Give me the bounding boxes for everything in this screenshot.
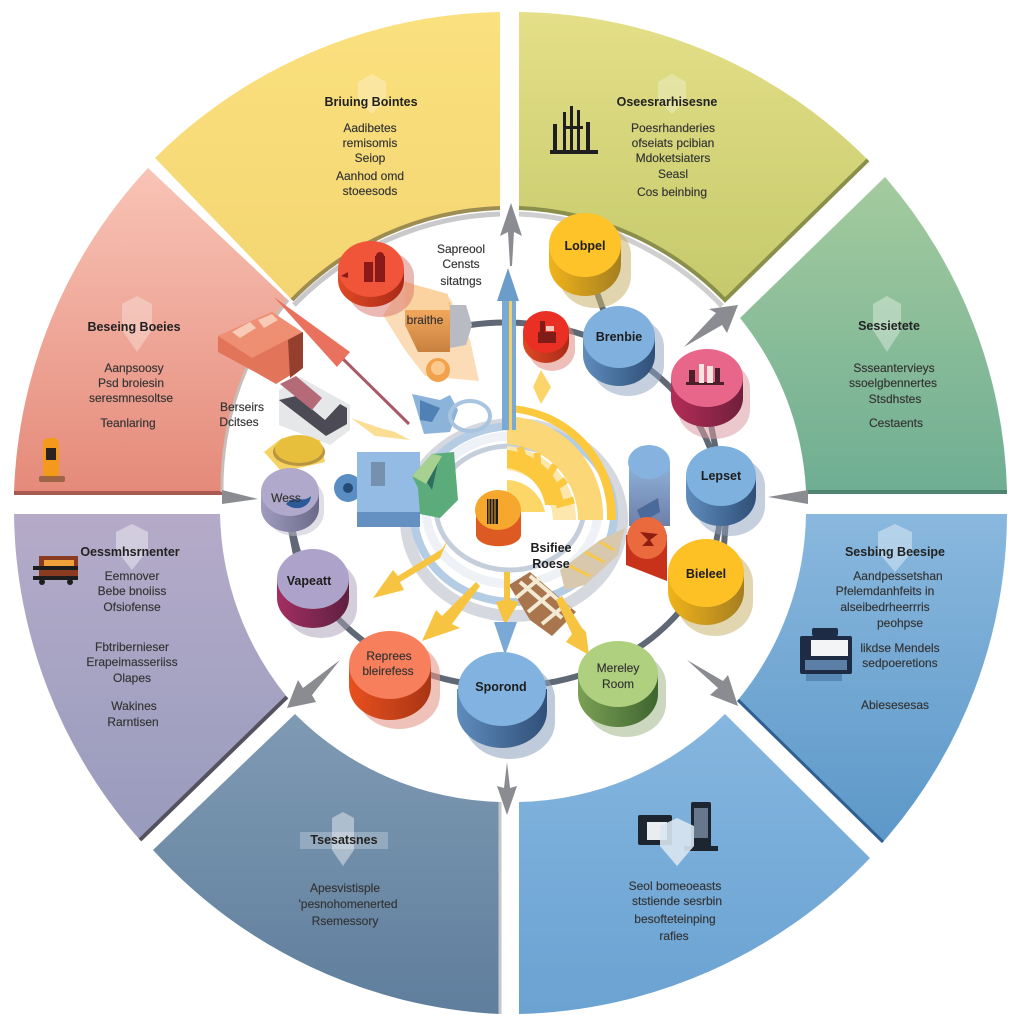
icon: blue folder (412, 394, 490, 434)
arrows: grey ring arrows (222, 203, 808, 815)
text block: sedpoeretions (862, 656, 938, 670)
text block: Bebe bnoiiss (98, 584, 166, 598)
button: yellow Lobpel: Lobpel (565, 239, 605, 253)
text block: Psd broiesin (98, 376, 164, 390)
label: center text: Roese (532, 557, 570, 571)
heading: Tsesatsnes (310, 833, 378, 847)
text block: stoeesods (343, 184, 397, 198)
button: orange Reprees: bleirefess (362, 664, 414, 678)
panel: green segment (740, 177, 1007, 492)
label: upper center text: Censts (442, 257, 480, 271)
icon: monitor (800, 628, 852, 681)
button: yellow Lobpel (549, 213, 631, 308)
button: yellow Bieleel: Bieleel (686, 567, 726, 581)
text block: likdse Mendels (860, 641, 940, 655)
button: purple Vapeatt: Vapeatt (287, 574, 332, 588)
icon: blue cylinder (628, 445, 670, 526)
text block: ofseiats pcibian (632, 136, 714, 150)
button: small red (523, 311, 575, 371)
text block: Stsdhstes (869, 392, 921, 406)
text block: Cestaents (869, 416, 923, 430)
label: upper center text (437, 242, 485, 288)
chart: yellow fan (507, 405, 616, 520)
icon: green figure (412, 452, 458, 518)
arrow: blue up arrow (497, 268, 519, 430)
icon: shield (116, 524, 148, 570)
text block: Erapeimasseriiss (86, 655, 178, 669)
heading: Oessmhsrnenter (80, 545, 180, 559)
heading: Beseing Boeies (87, 320, 181, 334)
icon: tools (550, 106, 598, 154)
text block (336, 121, 404, 198)
icon: shield (660, 818, 694, 866)
button: purple Wess (261, 468, 324, 536)
arrow: blue down pointer (494, 622, 517, 655)
button: red icon (338, 241, 414, 317)
heading: Sesbing Beesipe (845, 545, 945, 559)
panel: slate segment (153, 714, 500, 1014)
text block: Mdoketsiaters (636, 151, 710, 165)
central rings (406, 424, 622, 616)
icon: salmon folder box (218, 312, 303, 384)
text block (89, 361, 173, 430)
text block: Poesrhanderies (631, 121, 715, 135)
panel: blue right segment (738, 514, 1007, 842)
text block: Fbtribernieser (95, 640, 169, 654)
label: upper center text: Sapreool (437, 242, 485, 256)
button: green Merely Room: Mereley (597, 661, 639, 675)
icon: shield (358, 74, 386, 114)
text block: Ssseantervieys (853, 361, 935, 375)
icon: device (638, 802, 718, 851)
text block: ststiende sesrbin (632, 894, 722, 908)
icon: blue document (334, 452, 420, 527)
text block (86, 569, 178, 729)
icon: buildings (686, 364, 724, 385)
label: left center text: Berseirs (220, 400, 264, 414)
text block: Teanlaring (100, 416, 156, 430)
icon: tiny machine (538, 321, 556, 343)
text block (849, 361, 937, 430)
panel: lower blue segment (519, 714, 870, 1014)
icon: cart (33, 556, 78, 585)
label: left center text (219, 400, 264, 429)
icon: orange folder box (383, 281, 479, 382)
button: blue Brenbie: Brenbie (596, 330, 642, 344)
text block: 'pesnohomenerted (298, 897, 398, 911)
text block (836, 569, 943, 712)
text block: Aandpessetshan (853, 569, 943, 583)
text block: remisomis (343, 136, 397, 150)
text block: Seol bomeoeasts (629, 879, 721, 893)
icon: central barrel (475, 490, 521, 546)
label: upper center text: sitatngs (440, 274, 482, 288)
text block: Apesvistisple (310, 881, 380, 895)
button: yellow Bieleel (668, 539, 753, 636)
label: folder text: braithe (407, 313, 444, 327)
icon: shield (658, 74, 686, 114)
text block (629, 879, 722, 943)
button: blue Sporond: Sporond (475, 680, 527, 694)
button: orange Reprees: Reprees (366, 649, 412, 663)
text block (298, 881, 398, 928)
text block: Rarntisen (107, 715, 159, 729)
icon: shield (122, 296, 152, 352)
icon: red shield (626, 517, 667, 581)
button: blue Sporond (457, 652, 555, 759)
text block: Pfelemdanhfeits in (836, 584, 934, 598)
text block: Ofsiofense (103, 600, 161, 614)
label: center text: Bsifiee (530, 541, 572, 555)
button: blue Lepset (686, 446, 765, 536)
button: pink (671, 349, 750, 439)
panel: yellow segment (155, 12, 500, 305)
text block (631, 121, 715, 199)
icon: lantern (39, 438, 65, 482)
text block: Wakines (111, 699, 157, 713)
text block: Aanpsoosy (104, 361, 164, 375)
button: blue Brenbie (583, 306, 664, 396)
text block: Seasl (658, 167, 688, 181)
text block: Cos beinbing (637, 185, 707, 199)
connector: top link (291, 290, 726, 555)
arrow: yellow ribbon (351, 418, 410, 440)
text block: besofteteinping (634, 912, 716, 926)
icon: shield (332, 812, 354, 866)
button: blue Lepset: Lepset (701, 469, 742, 483)
text block: Abiesesesas (861, 698, 929, 712)
button: purple Wess: Wess (271, 491, 301, 505)
label: left center text: Dcitses (219, 415, 259, 429)
text block: Aadibetes (343, 121, 397, 135)
heading (300, 832, 388, 849)
text block: Eemnover (105, 569, 159, 583)
icon: grey box with pink piece (279, 376, 350, 445)
panel: purple segment (14, 514, 287, 840)
text block: peohpse (877, 616, 923, 630)
icon: brick lattice (509, 528, 625, 636)
text block: Olapes (113, 671, 151, 685)
text block: Aanhod omd (336, 169, 404, 183)
heading: Briuing Bointes (324, 95, 418, 109)
connector ring (291, 322, 721, 686)
panel: olive segment (519, 12, 868, 306)
icon: figures (341, 252, 385, 282)
button: green Merely Room: Room (602, 677, 634, 691)
icon: yellow diamond (533, 370, 551, 404)
button: purple Vapeatt (277, 549, 357, 638)
heading: Sessietete (858, 319, 920, 333)
arrow: salmon diagonal arrow (274, 297, 409, 424)
icon: shield (878, 524, 912, 572)
text block: alseibedrheerrris (840, 600, 930, 614)
icon: yellow disc (264, 435, 325, 472)
text block: rafies (659, 929, 689, 943)
arrows: yellow outward arrows (373, 540, 589, 655)
text block: Seiop (355, 151, 386, 165)
panel: salmon segment (14, 168, 288, 493)
text block: seresmnesoltse (89, 391, 173, 405)
text block: ssoelgbennertes (849, 376, 937, 390)
heading: Oseesrarhisesne (617, 95, 717, 109)
icon: shield (873, 296, 901, 352)
text block: Rsemessory (312, 914, 378, 928)
button: orange Reprees (349, 631, 440, 729)
button: green Merely Room (578, 641, 666, 737)
label: center text (530, 541, 572, 571)
